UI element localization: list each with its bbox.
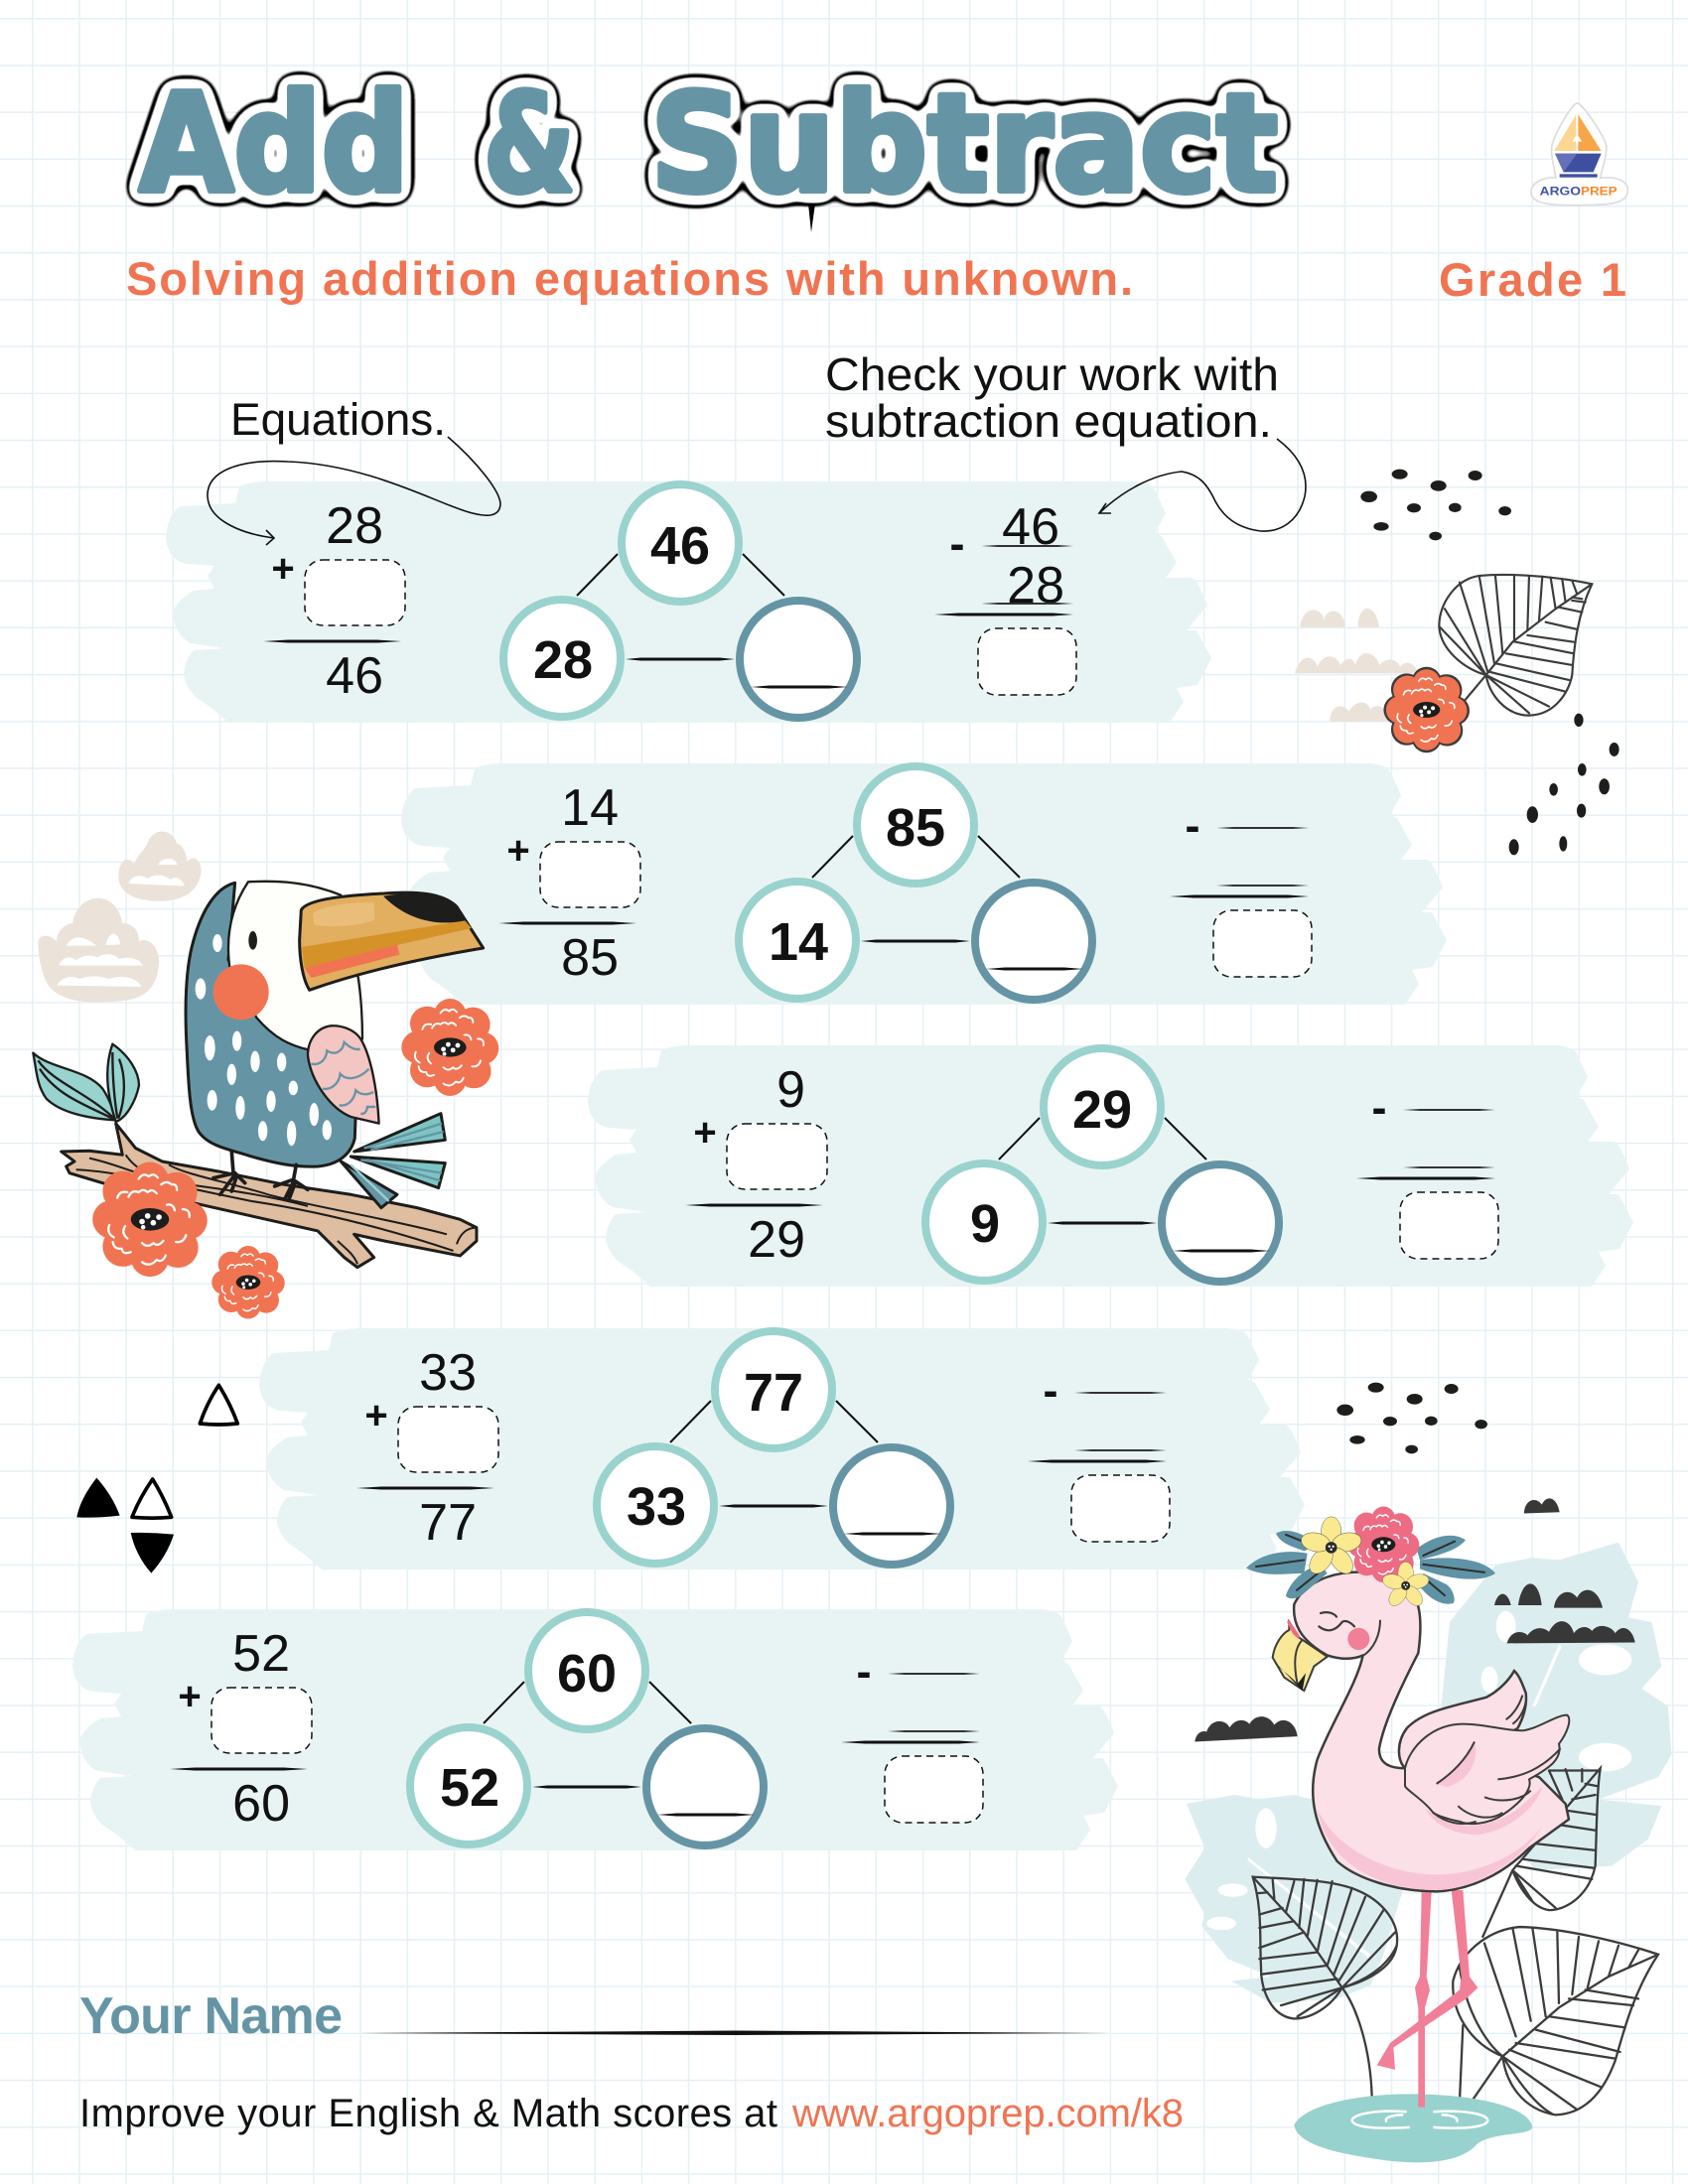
addition equation: 14 bbox=[561, 779, 619, 837]
row 5 bbox=[72, 1609, 1118, 1850]
flamingo body bbox=[1294, 1572, 1569, 1891]
branch bbox=[62, 1124, 477, 1268]
monstera holes bbox=[1206, 1611, 1631, 1958]
water puddle bbox=[1294, 2094, 1532, 2162]
panel: row 5 background bbox=[72, 1609, 1118, 1850]
subtraction check: 28 bbox=[1007, 557, 1064, 614]
row 3 bbox=[588, 1045, 1633, 1287]
addition equation bbox=[685, 1061, 827, 1269]
monstera leaves bbox=[1185, 1543, 1671, 2003]
subtraction check bbox=[1356, 1082, 1498, 1259]
flamingo legs bbox=[1377, 1890, 1477, 2108]
crown leaves bbox=[1246, 1531, 1495, 1604]
flamingo back wing bbox=[1399, 1671, 1526, 1773]
decoration: triangles bbox=[76, 1385, 237, 1573]
your name label: Your Name bbox=[79, 1987, 343, 2045]
beige clouds bbox=[38, 831, 202, 1003]
subtraction check: 46 bbox=[1002, 498, 1059, 556]
legs bbox=[213, 1152, 308, 1199]
addition equation: 29 bbox=[748, 1211, 805, 1269]
addition equation: 85 bbox=[561, 929, 619, 987]
addition equation: + bbox=[693, 1111, 717, 1155]
addition equation bbox=[356, 1344, 498, 1552]
number bond bbox=[597, 1331, 950, 1565]
feather spots bbox=[196, 934, 332, 1146]
illustration: flamingo scene bbox=[1185, 1498, 1671, 2162]
panel: row 1 background bbox=[166, 481, 1211, 723]
title: Add & Subtract: & bbox=[484, 66, 575, 223]
panel: row 3 background bbox=[588, 1045, 1633, 1287]
title: Add & Subtract: Subtract bbox=[650, 66, 1278, 223]
illustration: toucan on branch bbox=[33, 831, 484, 1277]
number bond: 29 bbox=[1072, 1080, 1132, 1140]
subtraction check bbox=[934, 498, 1076, 695]
decoration: side dots bbox=[1509, 714, 1619, 855]
subtraction check: - bbox=[856, 1646, 872, 1697]
number bond: 14 bbox=[769, 912, 828, 972]
flower: small bbox=[211, 1246, 285, 1318]
number bond: 77 bbox=[744, 1363, 803, 1423]
title spike mark bbox=[808, 204, 815, 232]
decoration: lower dots bbox=[1336, 1383, 1487, 1453]
flower: right of toucan bbox=[401, 999, 498, 1096]
decoration: line leaf bbox=[1439, 575, 1592, 716]
addition equation: 28 bbox=[326, 497, 383, 555]
logo: ArgoPrep: PREP bbox=[1581, 185, 1618, 199]
line leaves bbox=[1253, 1768, 1658, 2115]
subtraction check: - bbox=[949, 518, 965, 569]
number bond: 33 bbox=[627, 1477, 686, 1537]
wing shading and details bbox=[1425, 1696, 1561, 1835]
title: Add & Subtract: Add bbox=[139, 66, 409, 223]
eye bbox=[248, 931, 257, 950]
number bond: 28 bbox=[533, 630, 593, 690]
number bond bbox=[739, 766, 1092, 1000]
row 4 bbox=[259, 1328, 1305, 1570]
number bond: 60 bbox=[557, 1644, 617, 1704]
grade label: Grade 1 bbox=[1439, 253, 1626, 306]
row 2 bbox=[401, 763, 1447, 1005]
subtraction check bbox=[1028, 1365, 1170, 1542]
title: Add & Subtract bbox=[139, 66, 1278, 223]
arrow: equations to addition bbox=[208, 437, 500, 545]
subtraction check bbox=[1170, 800, 1312, 977]
addition equation: 52 bbox=[232, 1625, 290, 1683]
name line bbox=[359, 2031, 1108, 2035]
wing bbox=[308, 1025, 379, 1124]
number bond bbox=[503, 484, 857, 718]
addition equation: 77 bbox=[419, 1494, 477, 1552]
dark clouds bbox=[1195, 1498, 1635, 1741]
flamingo belly shade bbox=[1318, 1808, 1542, 1890]
addition equation bbox=[170, 1625, 312, 1833]
addition equation: + bbox=[364, 1394, 388, 1437]
flower: branch large bbox=[92, 1161, 208, 1277]
crown rose bbox=[1347, 1507, 1419, 1582]
addition equation: 33 bbox=[419, 1344, 477, 1402]
subtraction check: - bbox=[1043, 1365, 1058, 1416]
number bond: 52 bbox=[440, 1758, 499, 1818]
addition equation: + bbox=[506, 829, 530, 873]
addition equation bbox=[498, 779, 640, 987]
addition equation: 9 bbox=[776, 1061, 805, 1119]
subtitle: Solving addition equations with unknown. bbox=[126, 252, 1133, 305]
addition equation: + bbox=[178, 1675, 202, 1718]
flamingo front wing bbox=[1405, 1715, 1569, 1824]
panel: row 2 background bbox=[401, 763, 1447, 1005]
body bbox=[186, 883, 360, 1166]
cheek bbox=[213, 964, 269, 1020]
addition equation: + bbox=[271, 547, 295, 591]
label: Equations: Equations. bbox=[230, 394, 446, 445]
row 1 bbox=[166, 481, 1211, 723]
addition equation: 46 bbox=[326, 647, 383, 705]
addition equation: 60 bbox=[232, 1775, 290, 1833]
beak bbox=[300, 892, 484, 990]
subtraction check: - bbox=[1372, 1082, 1386, 1133]
footer: www.argoprep.com/k8 bbox=[791, 2092, 1184, 2135]
subtraction check: - bbox=[1186, 800, 1199, 851]
flamingo face bbox=[1319, 1612, 1380, 1655]
panel: row 4 background bbox=[259, 1328, 1305, 1570]
white chest bbox=[228, 882, 362, 1049]
number bond: 46 bbox=[650, 516, 710, 576]
arrow: check to subtraction bbox=[1099, 439, 1306, 531]
crown yellow flowers bbox=[1300, 1517, 1430, 1609]
tail feathers bbox=[341, 1114, 445, 1208]
label: check your work: subtraction equation. bbox=[825, 395, 1272, 447]
label: check your work bbox=[825, 348, 1279, 447]
flamingo beak bbox=[1273, 1621, 1328, 1691]
decoration: top dots bbox=[1360, 470, 1511, 540]
logo: ArgoPrep bbox=[1531, 103, 1627, 205]
number bond: 85 bbox=[886, 798, 945, 858]
number bond bbox=[410, 1612, 764, 1845]
logo: ArgoPrep: ARGO bbox=[1540, 185, 1581, 199]
label: check your work: Check your work with bbox=[825, 348, 1279, 400]
subtraction check bbox=[841, 1646, 983, 1823]
addition equation bbox=[263, 497, 405, 705]
decoration: outlined flower bbox=[1383, 667, 1470, 752]
decoration: beige clouds bbox=[1295, 609, 1418, 722]
footer: Improve your English & Math scores at bbox=[79, 2092, 777, 2135]
leaves bbox=[33, 1044, 139, 1122]
number bond: 9 bbox=[970, 1194, 1000, 1254]
number bond bbox=[925, 1048, 1279, 1282]
